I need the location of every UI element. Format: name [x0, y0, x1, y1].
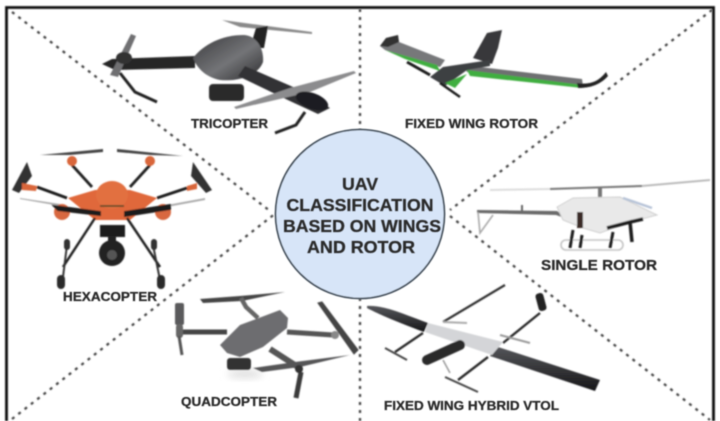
circle title text: AND ROTOR [307, 237, 415, 257]
circle title text: CLASSIFICATION [286, 195, 434, 215]
icon: quadcopter drone [175, 292, 358, 398]
circle title text: UAV [342, 174, 378, 194]
label: fixed wing hybrid VTOL: FIXED WING HYBRID VTOL [384, 398, 559, 413]
central circle: UAV classification [276, 130, 444, 298]
circle title text: BASED ON WINGS [283, 216, 441, 236]
icon: hexacopter drone [12, 149, 212, 289]
label: quadcopter: QUADCOPTER [181, 394, 278, 409]
label: single rotor: SINGLE ROTOR [541, 258, 658, 274]
label: hexacopter: HEXACOPTER [63, 289, 158, 304]
icon: fixed wing rotor drone [380, 30, 608, 97]
label: fixed wing rotor: FIXED WING ROTOR [405, 116, 539, 131]
icon: single rotor helicopter [477, 180, 710, 250]
circle title text [283, 174, 441, 257]
label: tricopter: TRICOPTER [191, 116, 269, 131]
icon: tricopter drone [102, 20, 356, 133]
icon: fixed wing hybrid VTOL drone [367, 285, 600, 392]
circle background [276, 130, 444, 298]
